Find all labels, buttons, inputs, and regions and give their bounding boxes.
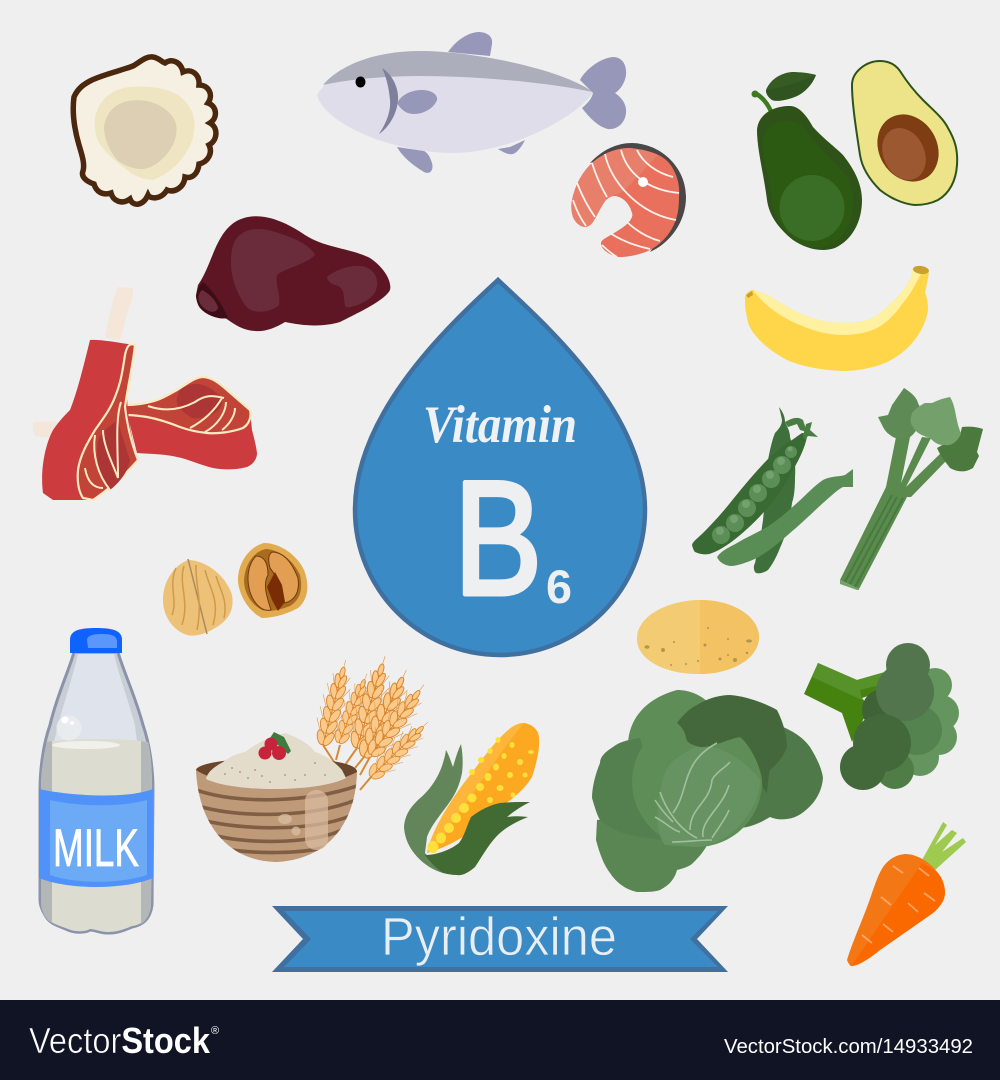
watermark logo: VectorStock — [29, 1020, 211, 1061]
icon: celery — [840, 388, 983, 590]
icon: walnut whole — [163, 559, 233, 636]
banner: pyridoxine — [272, 906, 728, 972]
icon: avocado half — [852, 61, 957, 205]
image id: VectorStock.com/14933492 — [724, 1036, 973, 1058]
icon: carrot — [847, 822, 966, 966]
icon: banana — [745, 265, 929, 371]
icon: cabbage — [592, 690, 823, 892]
icon: fish — [317, 32, 626, 173]
icon: liver — [196, 216, 390, 331]
icon: walnut half — [238, 543, 307, 618]
icon: potato — [637, 600, 759, 674]
icon: broccoli — [804, 643, 959, 790]
icon: milk bottle — [39, 628, 153, 933]
icon: salmon steak — [571, 143, 686, 257]
heading: vitamin: Vitamin — [423, 396, 577, 454]
banner: pyridoxine: Pyridoxine — [381, 907, 617, 967]
milk label — [39, 789, 153, 887]
icon: pea pods — [692, 407, 853, 573]
registered mark: ® — [211, 1025, 219, 1037]
heading: B6: 6 — [546, 560, 572, 613]
icon: corn — [404, 723, 539, 875]
icon: avocado whole — [752, 72, 862, 250]
icon: porridge bowl — [196, 732, 357, 862]
icon: oyster — [73, 57, 216, 204]
heading: B6: B — [454, 448, 542, 629]
milk label: MILK — [53, 819, 139, 878]
footer bar — [0, 1000, 1000, 1080]
panel: vitamin drop — [355, 280, 645, 655]
icon: lamb chops — [33, 287, 257, 500]
icon: wheat — [310, 652, 436, 790]
